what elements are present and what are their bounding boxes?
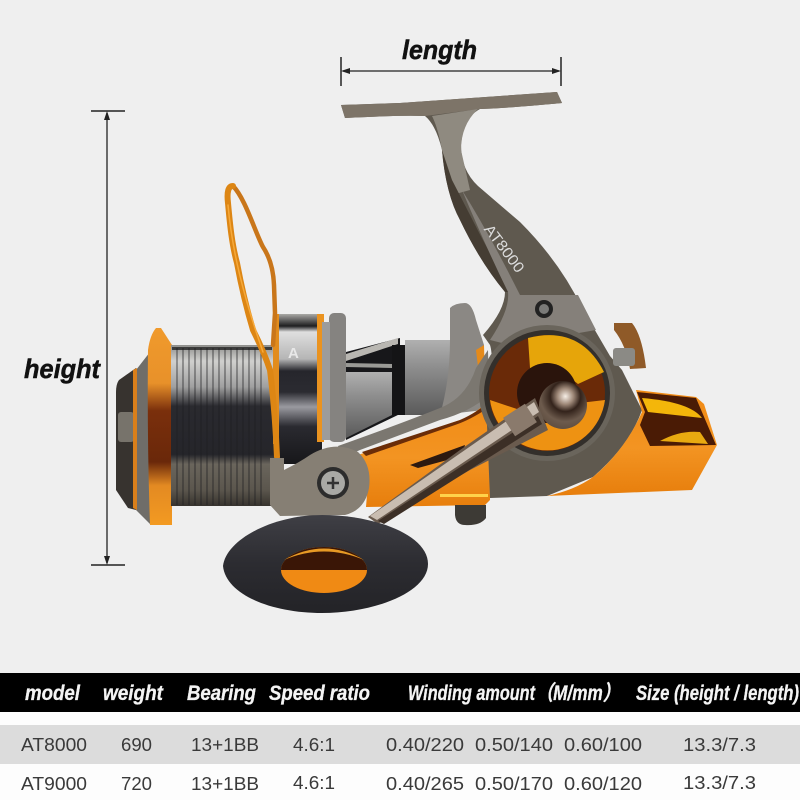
table header labels: Speed ratio	[269, 682, 370, 705]
stem highlight	[432, 109, 478, 195]
row AT8000: 4.6:1	[293, 735, 335, 755]
gear cover disc	[479, 325, 615, 461]
table header labels: （M/mm）	[536, 681, 620, 705]
bail wire	[228, 186, 277, 457]
row AT9000	[21, 773, 756, 794]
specification table	[0, 673, 800, 800]
row AT9000: 720	[121, 774, 152, 794]
row AT9000: 4.6:1	[293, 773, 335, 793]
height dimension arrow and label: height	[24, 354, 101, 384]
table header band	[0, 673, 800, 712]
handle knob	[223, 515, 428, 613]
rotor arm base	[338, 350, 489, 458]
row AT9000: AT9000	[21, 774, 87, 794]
row AT9000: 13+1BB	[191, 774, 259, 794]
model engraving: AT8000	[480, 221, 527, 276]
table header labels: model	[25, 682, 81, 705]
crank handle	[368, 398, 548, 524]
row AT8000: 690	[121, 735, 152, 755]
reel foot	[455, 505, 486, 525]
row AT9000: 13.3/7.3	[683, 773, 756, 793]
row AT8000: 13.3/7.3	[683, 735, 756, 755]
row AT8000: 0.50/140	[475, 735, 553, 755]
table header labels: Winding amount	[408, 682, 536, 705]
grey rotor ring	[329, 313, 346, 442]
length dimension arrow and label	[341, 35, 561, 86]
front spool section: A	[288, 345, 299, 362]
fishing reel illustration	[116, 92, 717, 613]
table backing	[0, 712, 800, 800]
row AT8000: AT8000	[21, 735, 87, 755]
table header labels: Bearing	[187, 682, 256, 705]
row AT9000: 0.60/120	[564, 774, 642, 794]
top bar of rod stand	[341, 92, 562, 118]
height dimension arrow and label	[24, 111, 125, 565]
table header labels	[25, 681, 799, 705]
spool flange	[148, 328, 172, 525]
row AT8000: 0.60/100	[564, 735, 642, 755]
stem left shadow	[442, 150, 512, 292]
stand screw	[535, 300, 553, 318]
orange body	[358, 398, 490, 507]
table header labels: weight	[103, 682, 164, 705]
rotor cylinder	[322, 303, 485, 440]
row background AT8000	[0, 725, 800, 764]
row AT8000: 13+1BB	[191, 735, 259, 755]
drag knob	[613, 323, 646, 369]
length dimension arrow and label: length	[402, 35, 477, 65]
line spool	[171, 345, 276, 506]
row AT8000	[21, 735, 756, 755]
orange body details	[362, 402, 488, 497]
front spool section	[273, 314, 324, 464]
rear cap of spool	[116, 352, 150, 524]
orange tail cover	[547, 390, 717, 496]
bail arm hub	[270, 447, 370, 516]
row AT8000: 0.40/220	[386, 735, 464, 755]
row AT9000: 0.50/170	[475, 774, 553, 794]
crank ball	[517, 363, 587, 429]
row AT9000: 0.40/265	[386, 774, 464, 794]
stem plate	[462, 190, 596, 345]
rod stand arm and body	[341, 92, 642, 498]
